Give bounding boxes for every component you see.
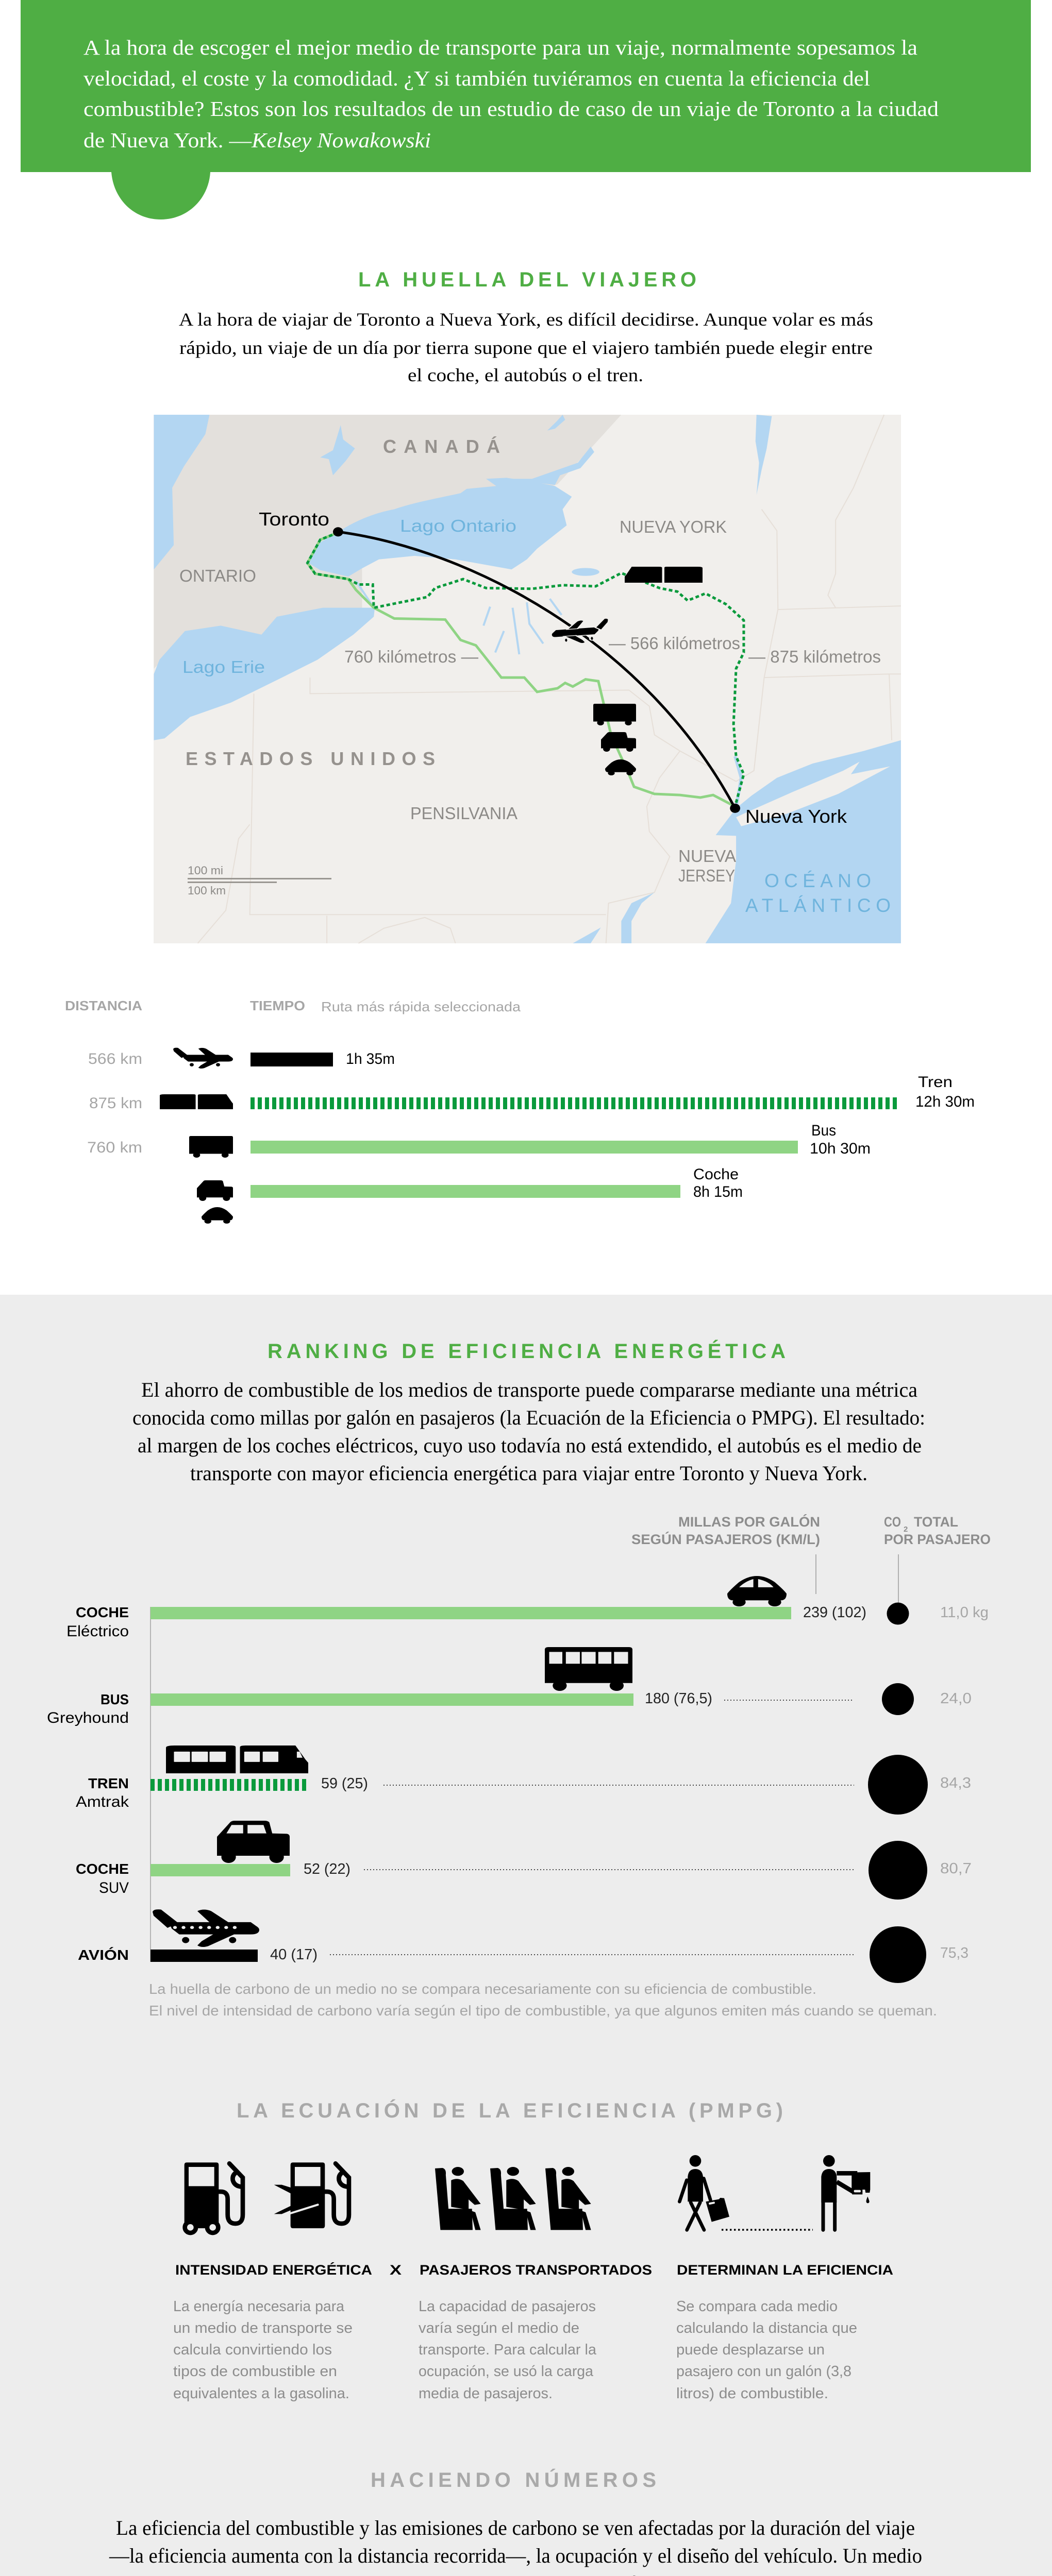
chart headers: Ruta más rápida seleccionada <box>321 999 521 1014</box>
text block: passengers: media de pasajeros. <box>419 2385 553 2402</box>
row: suv <box>76 1821 972 1900</box>
row: electric car <box>66 1576 989 1640</box>
row: electric car: COCHE <box>76 1604 129 1620</box>
banner: introduction <box>21 0 1031 219</box>
row: bus: 180 (76,5) <box>645 1690 712 1707</box>
map labels: PENSILVANIA <box>410 804 517 823</box>
icon: suv on map <box>601 732 636 752</box>
column headers: CO <box>884 1514 901 1530</box>
route: train <box>307 533 744 806</box>
row: electric car: 239 (102) <box>803 1604 866 1621</box>
city marker: Toronto <box>333 527 343 536</box>
map labels: Nueva York <box>745 806 847 827</box>
row: bus: 24,0 <box>940 1690 972 1707</box>
heading: la ecuacion de la eficiencia: LA ECUACIÓN DE LA EFICIENCIA (PMPG) <box>237 2098 783 2122</box>
row: plane <box>78 1909 968 1983</box>
row: car: Coche <box>693 1166 739 1183</box>
row: train: 875 km <box>89 1095 142 1112</box>
row: train: Tren <box>918 1074 953 1091</box>
text block: huella intro <box>179 309 873 385</box>
icon: fuel pump with wheels <box>185 2162 243 2233</box>
map scale bar: 100 km <box>188 884 226 897</box>
map scale bar: 100 mi <box>188 864 223 877</box>
map labels: NUEVA <box>678 846 736 866</box>
icon: plane on map <box>550 618 610 646</box>
chart headers: DISTANCIA <box>65 998 142 1013</box>
text block: efficiency: pasajero con un galón (3,8 <box>676 2363 851 2380</box>
row: electric car: 11,0 kg <box>940 1604 989 1621</box>
text block: ranking intro: conocida como millas por galón en pasajeros (la Ecuación de la Eficiencia o PMPG). El resultado: <box>132 1406 925 1429</box>
icon: bus on map <box>593 704 636 725</box>
map labels: — 566 kilómetros <box>609 634 740 653</box>
row: plane <box>88 1048 395 1069</box>
row: train <box>76 1745 971 1815</box>
chart headers: TIEMPO <box>250 998 305 1013</box>
text block: efficiency: Se compara cada medio <box>676 2298 838 2315</box>
text block: haciendo numeros intro <box>109 2516 922 2576</box>
text block: huella intro: A la hora de viajar de Toronto a Nueva York, es difícil decidirse. Aunque volar es más <box>179 309 873 330</box>
icon: car on map <box>605 759 636 775</box>
column headers: MILLAS POR GALÓN <box>678 1514 820 1530</box>
column headers: 2 <box>904 1525 908 1534</box>
map: Toronto to New York routes <box>154 415 901 943</box>
equation labels <box>175 2262 893 2278</box>
row: bus: Bus <box>811 1122 836 1139</box>
text block: energy intensity: equivalentes a la gasolina. <box>173 2385 349 2402</box>
column headers: TOTAL <box>914 1514 958 1530</box>
row: train: TREN <box>88 1775 129 1791</box>
icon: fuel pump with wings <box>274 2162 349 2228</box>
column headers <box>631 1514 991 1547</box>
row: train: 84,3 <box>940 1775 971 1791</box>
chart footnote: El nivel de intensidad de carbono varía según el tipo de combustible, ya que algunos emiten más cuando se queman. <box>149 2003 937 2019</box>
text block: passengers: varía según el medio de <box>419 2320 579 2336</box>
map labels: JERSEY <box>678 866 735 885</box>
map labels <box>179 436 891 916</box>
text block: ranking intro: transporte con mayor eficiencia energética para viajar entre Toronto y Nueva York. <box>190 1462 867 1485</box>
row: train <box>89 1074 975 1112</box>
text block: energy intensity <box>173 2298 353 2402</box>
map scale bar <box>188 864 331 897</box>
text block: energy intensity: tipos de combustible en <box>173 2363 337 2380</box>
row: bus <box>87 1122 871 1158</box>
row: bus: Greyhound <box>47 1709 129 1726</box>
equation labels: INTENSIDAD ENERGÉTICA <box>175 2262 372 2278</box>
text block: passengers: ocupación, se usó la carga <box>419 2363 594 2380</box>
chart: distance and time <box>65 998 975 1224</box>
route: bus and car <box>307 533 735 806</box>
icon: person pouring one gallon <box>821 2155 870 2230</box>
text block: efficiency: calculando la distancia que <box>676 2320 857 2336</box>
map labels: OCÉANO <box>764 870 871 891</box>
text block: ranking intro: El ahorro de combustible de los medios de transporte puede compararse mediante una métrica <box>141 1378 917 1401</box>
heading: la huella del viajero: LA HUELLA DEL VIAJERO <box>358 268 696 291</box>
row: bus: BUS <box>101 1691 129 1707</box>
map labels: 760 kilómetros — <box>344 647 478 666</box>
heading: haciendo numeros: HACIENDO NÚMEROS <box>371 2468 656 2492</box>
row: suv: 52 (22) <box>304 1861 350 1877</box>
banner text: de Nueva York. — Kelsey Nowakowski <box>84 128 431 152</box>
equation labels: DETERMINAN LA EFICIENCIA <box>677 2262 893 2278</box>
icon: train on map <box>625 567 703 583</box>
row: bus: 10h 30m <box>810 1140 871 1157</box>
map geography <box>154 415 901 943</box>
city marker: New York <box>730 804 740 813</box>
row: plane: 40 (17) <box>270 1946 318 1963</box>
map labels: — 875 kilómetros <box>748 647 881 666</box>
text block: efficiency: puede desplazarse un <box>676 2342 825 2358</box>
text block: ranking intro <box>132 1378 925 1485</box>
heading: ranking: RANKING DE EFICIENCIA ENERGÉTICA <box>268 1340 786 1363</box>
chart footnote: La huella de carbono de un medio no se compara necesariamente con su eficiencia de combustible. <box>149 1981 816 1997</box>
text block: passengers <box>419 2298 597 2402</box>
row: bus: 760 km <box>87 1139 142 1156</box>
row: plane: 75,3 <box>940 1945 968 1961</box>
icon: seated passengers <box>435 2167 591 2230</box>
text block: energy intensity: La energía necesaria para <box>173 2298 345 2315</box>
text block: energy intensity: calcula convirtiendo los <box>173 2342 332 2358</box>
text block: haciendo numeros intro: —la eficiencia aumenta con la distancia recorrida—, la ocupación y el diseño del vehículo. Un medio <box>109 2544 922 2567</box>
map labels: Lago Ontario <box>400 516 516 535</box>
text block: efficiency: litros) de combustible. <box>676 2385 828 2402</box>
row: electric car: Eléctrico <box>66 1623 129 1640</box>
map labels: ONTARIO <box>179 566 256 585</box>
row: plane: 1h 35m <box>346 1050 395 1067</box>
row: plane: 566 km <box>88 1050 142 1067</box>
route: plane <box>338 532 735 808</box>
row: suv: SUV <box>99 1879 129 1896</box>
row: suv: COCHE <box>76 1861 129 1877</box>
banner text: A la hora de escoger el mejor medio de transporte para un viaje, normalmente sopesamos la <box>84 36 917 59</box>
row: train: Amtrak <box>76 1793 129 1810</box>
text block: huella intro: rápido, un viaje de un día por tierra supone que el viajero también puede elegir entre <box>179 337 873 358</box>
chart footnote <box>149 1981 937 2019</box>
text block: efficiency <box>676 2298 857 2402</box>
banner text: velocidad, el coste y la comodidad. ¿Y si también tuviéramos en cuenta la eficiencia del <box>84 66 870 90</box>
text block: passengers: La capacidad de pasajeros <box>419 2298 596 2315</box>
map labels: Lago Erie <box>182 657 265 676</box>
text block: huella intro: el coche, el autobús o el tren. <box>408 365 643 385</box>
row: car: 8h 15m <box>693 1183 743 1200</box>
text block: energy intensity: un medio de transporte se <box>173 2320 353 2336</box>
row: train: 59 (25) <box>321 1775 368 1792</box>
map labels: NUEVA YORK <box>620 517 727 536</box>
banner text: combustible? Estos son los resultados de un estudio de caso de un viaje de Toronto a la ciudad <box>84 97 939 121</box>
map labels: ESTADOS UNIDOS <box>186 748 435 769</box>
icon: walking person with fuel can <box>679 2155 729 2230</box>
row: suv: 80,7 <box>940 1860 972 1877</box>
row: car <box>197 1166 743 1224</box>
column headers: POR PASAJERO <box>884 1532 991 1547</box>
row: plane: AVIÓN <box>78 1947 129 1963</box>
map labels: ATLÁNTICO <box>745 895 891 916</box>
chart: ranking bars <box>47 1514 991 2019</box>
chart headers <box>65 998 521 1014</box>
banner text <box>84 36 939 152</box>
map labels: CANADÁ <box>383 436 500 457</box>
icon: dotted distance <box>722 2229 813 2231</box>
equation labels: X <box>390 2262 402 2278</box>
text block: passengers: transporte. Para calcular la <box>419 2342 597 2358</box>
text block: ranking intro: al margen de los coches eléctricos, cuyo uso todavía no está extendido, el autobús es el medio de <box>138 1434 922 1457</box>
row: bus <box>47 1647 972 1726</box>
column headers: SEGÚN PASAJEROS (KM/L) <box>631 1531 820 1547</box>
equation labels: PASAJEROS TRANSPORTADOS <box>420 2262 652 2278</box>
panel: grey section <box>0 1295 1052 2576</box>
row: train: 12h 30m <box>915 1093 975 1110</box>
text block: haciendo numeros intro: La eficiencia del combustible y las emisiones de carbono se ven afectadas por la duración del viaje <box>116 2516 915 2539</box>
map labels: Toronto <box>259 509 329 530</box>
